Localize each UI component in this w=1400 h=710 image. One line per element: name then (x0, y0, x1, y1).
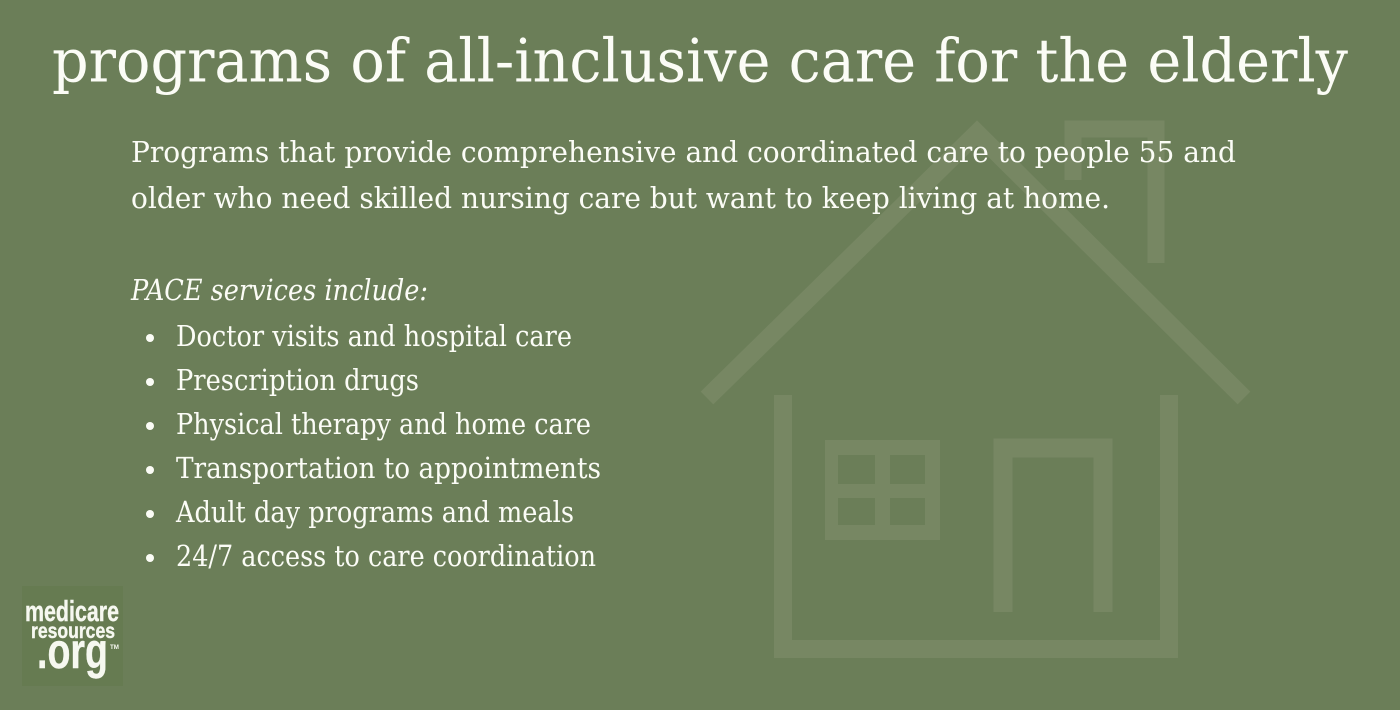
description paragraph: Programs that provide comprehensive and coordinated care to people 55 and (131, 135, 1236, 169)
services list: Physical therapy and home care (176, 407, 591, 441)
title: programs of all-inclusive care for the elderly (52, 26, 1348, 96)
house roof (707, 133, 1244, 398)
services subheading: PACE services include: (130, 273, 428, 307)
icon: house watermark (707, 129, 1244, 649)
services list: Prescription drugs (176, 363, 419, 397)
house window (825, 440, 940, 540)
logo: medicareresources.org: medicare (25, 596, 119, 628)
description paragraph (131, 135, 1236, 215)
logo: medicareresources.org: TM (110, 645, 119, 651)
services list: Transportation to appointments (176, 451, 601, 485)
logo: medicareresources.org: .org (37, 623, 108, 679)
house chimney (1073, 129, 1156, 263)
logo: medicareresources.org (22, 586, 123, 686)
services list (146, 319, 601, 573)
services list: Doctor visits and hospital care (176, 319, 572, 353)
description paragraph: older who need skilled nursing care but want to keep living at home. (131, 181, 1110, 215)
house walls (783, 395, 1169, 649)
services list: 24/7 access to care coordination (176, 539, 596, 573)
services list: Adult day programs and meals (175, 495, 574, 529)
house door (1003, 448, 1103, 612)
logo: medicareresources.org: resources (31, 620, 115, 643)
